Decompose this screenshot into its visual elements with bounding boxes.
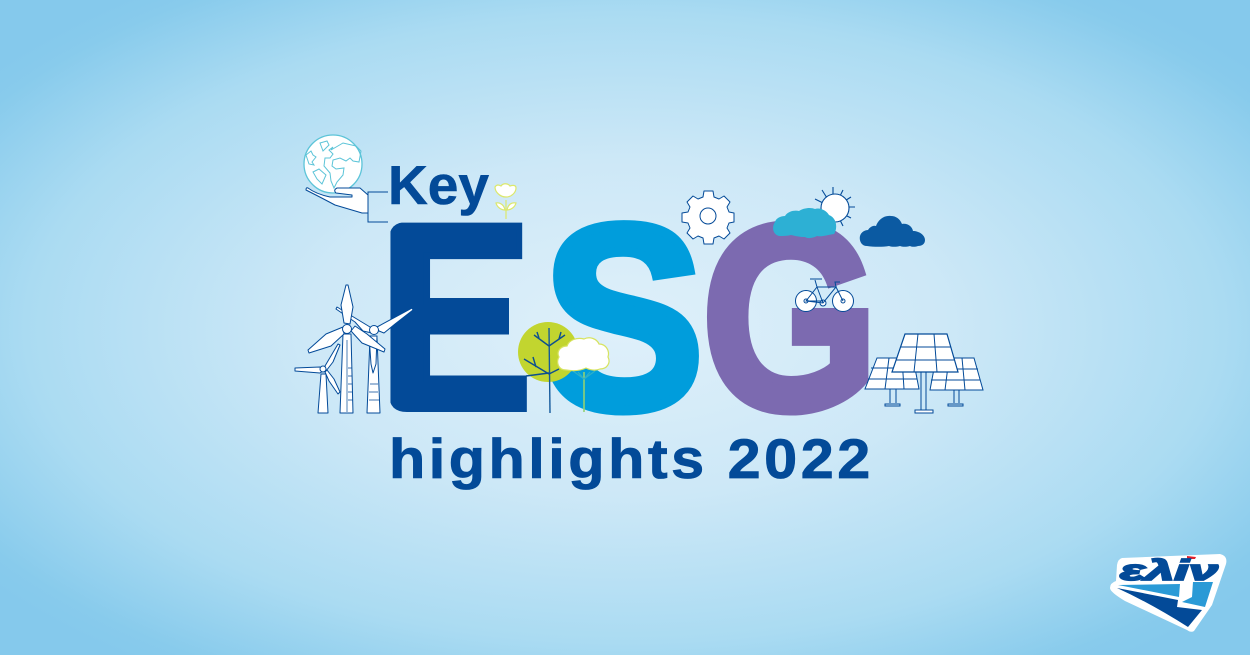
icon: bicycle: [796, 279, 854, 312]
icon: solar panels: [865, 334, 983, 413]
right panel: [930, 358, 983, 406]
icon: dark cloud: [860, 216, 925, 247]
logo: [1110, 554, 1226, 632]
heading: highlights 2022: highlights 2022: [389, 429, 870, 491]
centre panel: [892, 334, 958, 413]
icon: cyan cloud: [773, 208, 836, 238]
icon: green tree: [518, 322, 578, 413]
rear turbine: [336, 307, 413, 413]
icon: flower: [495, 184, 516, 219]
front turbine: [308, 285, 385, 413]
left panel: [865, 358, 919, 406]
icon: wind turbines: [295, 285, 413, 413]
icon: white cloud tree: [558, 338, 609, 412]
icon: gear: [682, 191, 734, 244]
letter S: S: [543, 172, 704, 464]
logo: ελiν: [1120, 555, 1218, 587]
icon: sun: [815, 187, 855, 226]
icon: hand holding globe: [304, 135, 388, 222]
heading: Key: Key: [388, 154, 489, 216]
small turbine: [295, 344, 340, 413]
letter E: E: [378, 168, 533, 465]
letter G: G: [702, 170, 878, 464]
